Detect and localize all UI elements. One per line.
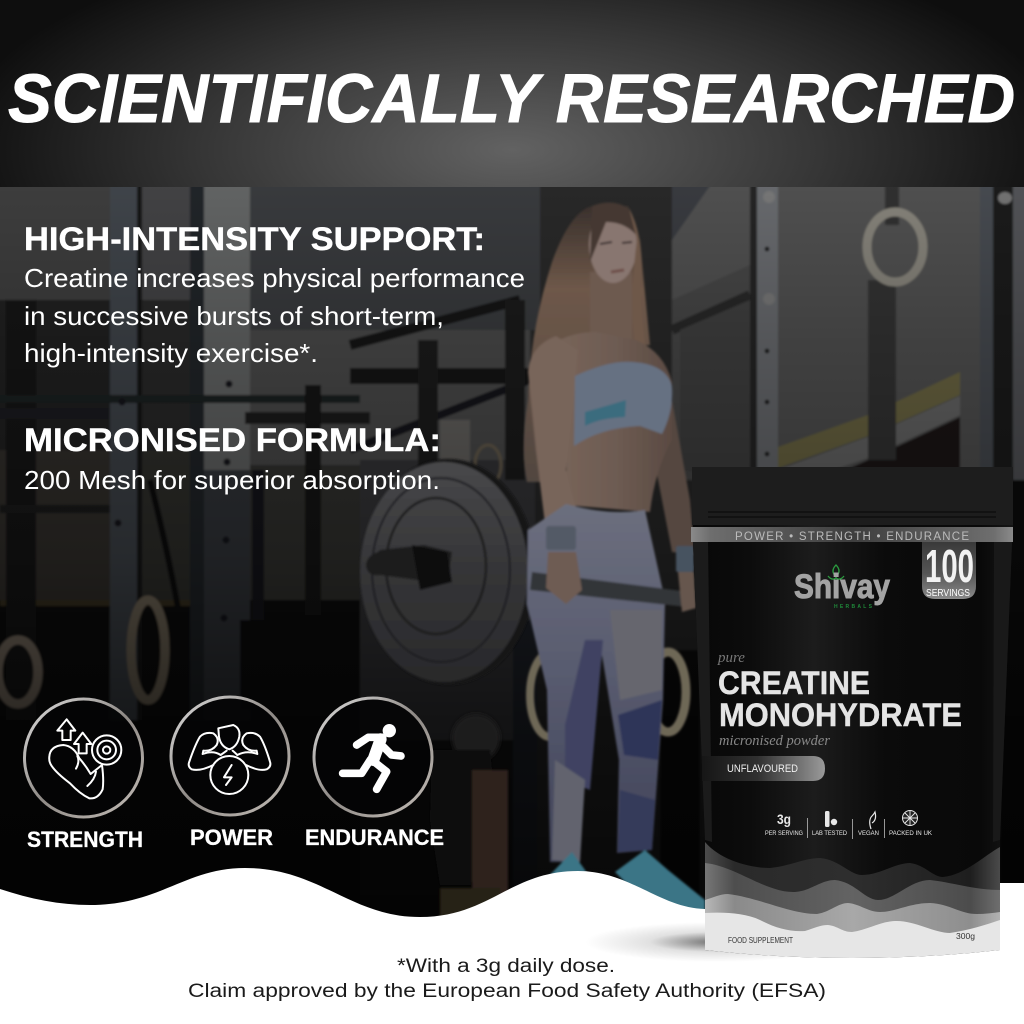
product pouch: 300g [956, 932, 975, 941]
top band [691, 527, 1013, 542]
product pouch [691, 467, 1013, 958]
leggings [527, 504, 665, 862]
feature badges row: PER SERVING [765, 830, 803, 837]
brand logo: Shivay [794, 568, 890, 606]
text block: high-intensity support: high-intensity exercise*. [24, 338, 318, 368]
icon labels: ENDURANCE [305, 825, 444, 850]
feature badges row [765, 810, 933, 839]
wrist wraps [546, 526, 576, 550]
right wall [672, 150, 1024, 480]
icon: strength [24, 699, 142, 817]
bandeau top [574, 362, 672, 446]
product name: pure [717, 650, 745, 666]
feature badges row: 3g [777, 811, 791, 827]
servings badge [922, 542, 976, 599]
icon labels: POWER [190, 825, 273, 850]
product pouch: UNFLAVOURED [727, 763, 798, 775]
text block: high-intensity support: HIGH-INTENSITY SUPPORT: [24, 221, 485, 257]
barbell plate [360, 459, 536, 685]
text block: micronised formula: 200 Mesh for superior absorption. [24, 465, 440, 495]
photo darkening overlay [0, 187, 1024, 927]
near arm [528, 336, 582, 532]
feature badges row: VEGAN [858, 830, 879, 837]
pouch body [692, 467, 1013, 958]
feature badges row: PACKED IN UK [889, 830, 933, 837]
photo foreground: plate, person, woman [360, 202, 705, 923]
product pouch: MONOHYDRATE [719, 697, 962, 733]
product pouch: POWER • STRENGTH • ENDURANCE [735, 531, 969, 543]
torso [545, 332, 672, 512]
feature badges row: LAB TESTED [812, 830, 847, 837]
footnote: Claim approved by the European Food Safety Authority (EFSA) [188, 981, 826, 1002]
mid background [350, 300, 520, 345]
pouch waves [705, 842, 1000, 950]
text block: high-intensity support [24, 221, 525, 368]
icon labels: STRENGTH [27, 827, 143, 852]
shoes [545, 852, 590, 882]
pouch footer text: FOOD SUPPLEMENT [728, 936, 793, 945]
product pouch: CREATINE [718, 665, 870, 701]
white wave footer [0, 868, 1024, 1024]
product pouch: 100 [925, 540, 974, 592]
gym photo background [0, 150, 1024, 950]
footnote [188, 956, 826, 1002]
product pouch: micronised powder [719, 733, 830, 749]
text block: micronised formula: MICRONISED FORMULA: [24, 422, 441, 458]
face [589, 207, 637, 283]
neck [590, 272, 632, 348]
text block: micronised formula [24, 422, 441, 495]
brand logo: HERBALS [834, 604, 873, 610]
hands [546, 552, 582, 604]
far arm [650, 400, 695, 555]
bar [530, 572, 696, 608]
pouch shadow [585, 922, 845, 962]
icon: endurance [314, 698, 432, 816]
background person [452, 714, 500, 762]
left rack [110, 150, 138, 720]
woman [524, 202, 705, 914]
rings behind legs [530, 653, 570, 737]
product pouch: SERVINGS [926, 588, 970, 599]
text block: high-intensity support: in successive bursts of short-term, [24, 301, 444, 331]
footnote: *With a 3g daily dose. [397, 956, 615, 977]
hair [524, 206, 650, 482]
icon: power [171, 697, 289, 815]
title band [0, 0, 1024, 187]
flavour pill [702, 756, 825, 781]
icon labels [27, 825, 444, 852]
text block: high-intensity support: Creatine increases physical performance [24, 263, 525, 293]
